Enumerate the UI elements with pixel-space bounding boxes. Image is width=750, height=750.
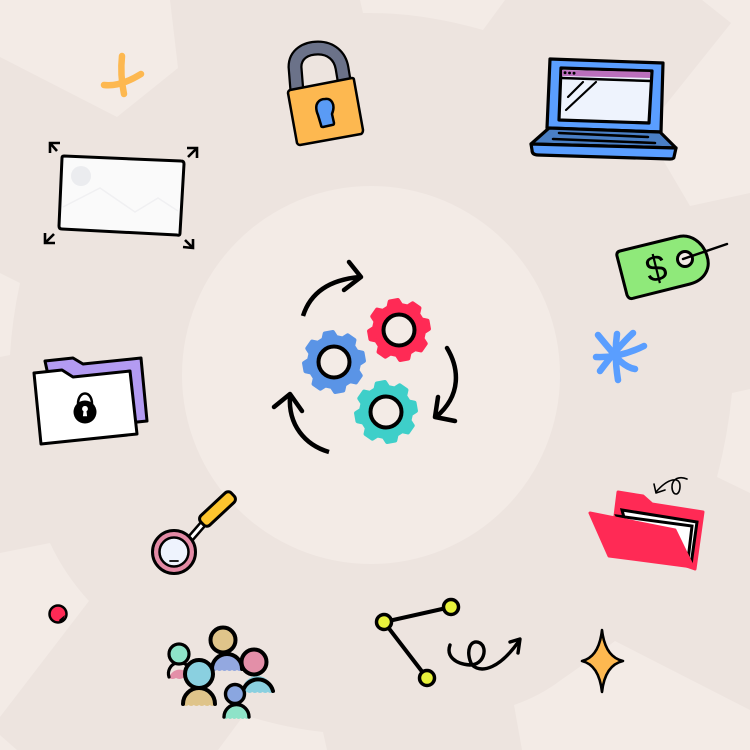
gear: blue <box>300 328 368 396</box>
icon: padlock <box>288 48 363 145</box>
icon: locked folder <box>34 358 147 444</box>
gear: teal <box>352 378 420 446</box>
icon: red dot <box>50 606 66 622</box>
arrow: right <box>435 348 456 421</box>
icon: red folder <box>590 492 703 569</box>
icon: magnifying glass <box>152 490 237 574</box>
central process cycle <box>274 262 456 452</box>
person: centre <box>183 660 215 706</box>
icon: group of people <box>168 628 273 719</box>
price symbol: $ <box>641 246 671 291</box>
resize arrows <box>45 143 197 248</box>
person: bottom <box>224 684 249 719</box>
icon: blue asterisk <box>596 333 644 380</box>
arrow: left <box>274 394 329 452</box>
folder lock badge <box>74 394 96 424</box>
arrow: top <box>303 262 361 316</box>
icon: connected nodes <box>376 600 458 686</box>
arrow: squiggle <box>449 639 520 669</box>
person: left <box>168 644 190 679</box>
gear: red <box>365 296 433 364</box>
icon: plus doodle <box>104 56 141 94</box>
icon: four-point star <box>582 630 623 692</box>
arrow: folder squiggle <box>654 478 687 494</box>
icon: price tag <box>617 236 727 299</box>
person: top <box>210 628 242 671</box>
icon: laptop <box>531 59 676 159</box>
icon: image placeholder <box>45 143 197 248</box>
person: right <box>242 650 273 693</box>
